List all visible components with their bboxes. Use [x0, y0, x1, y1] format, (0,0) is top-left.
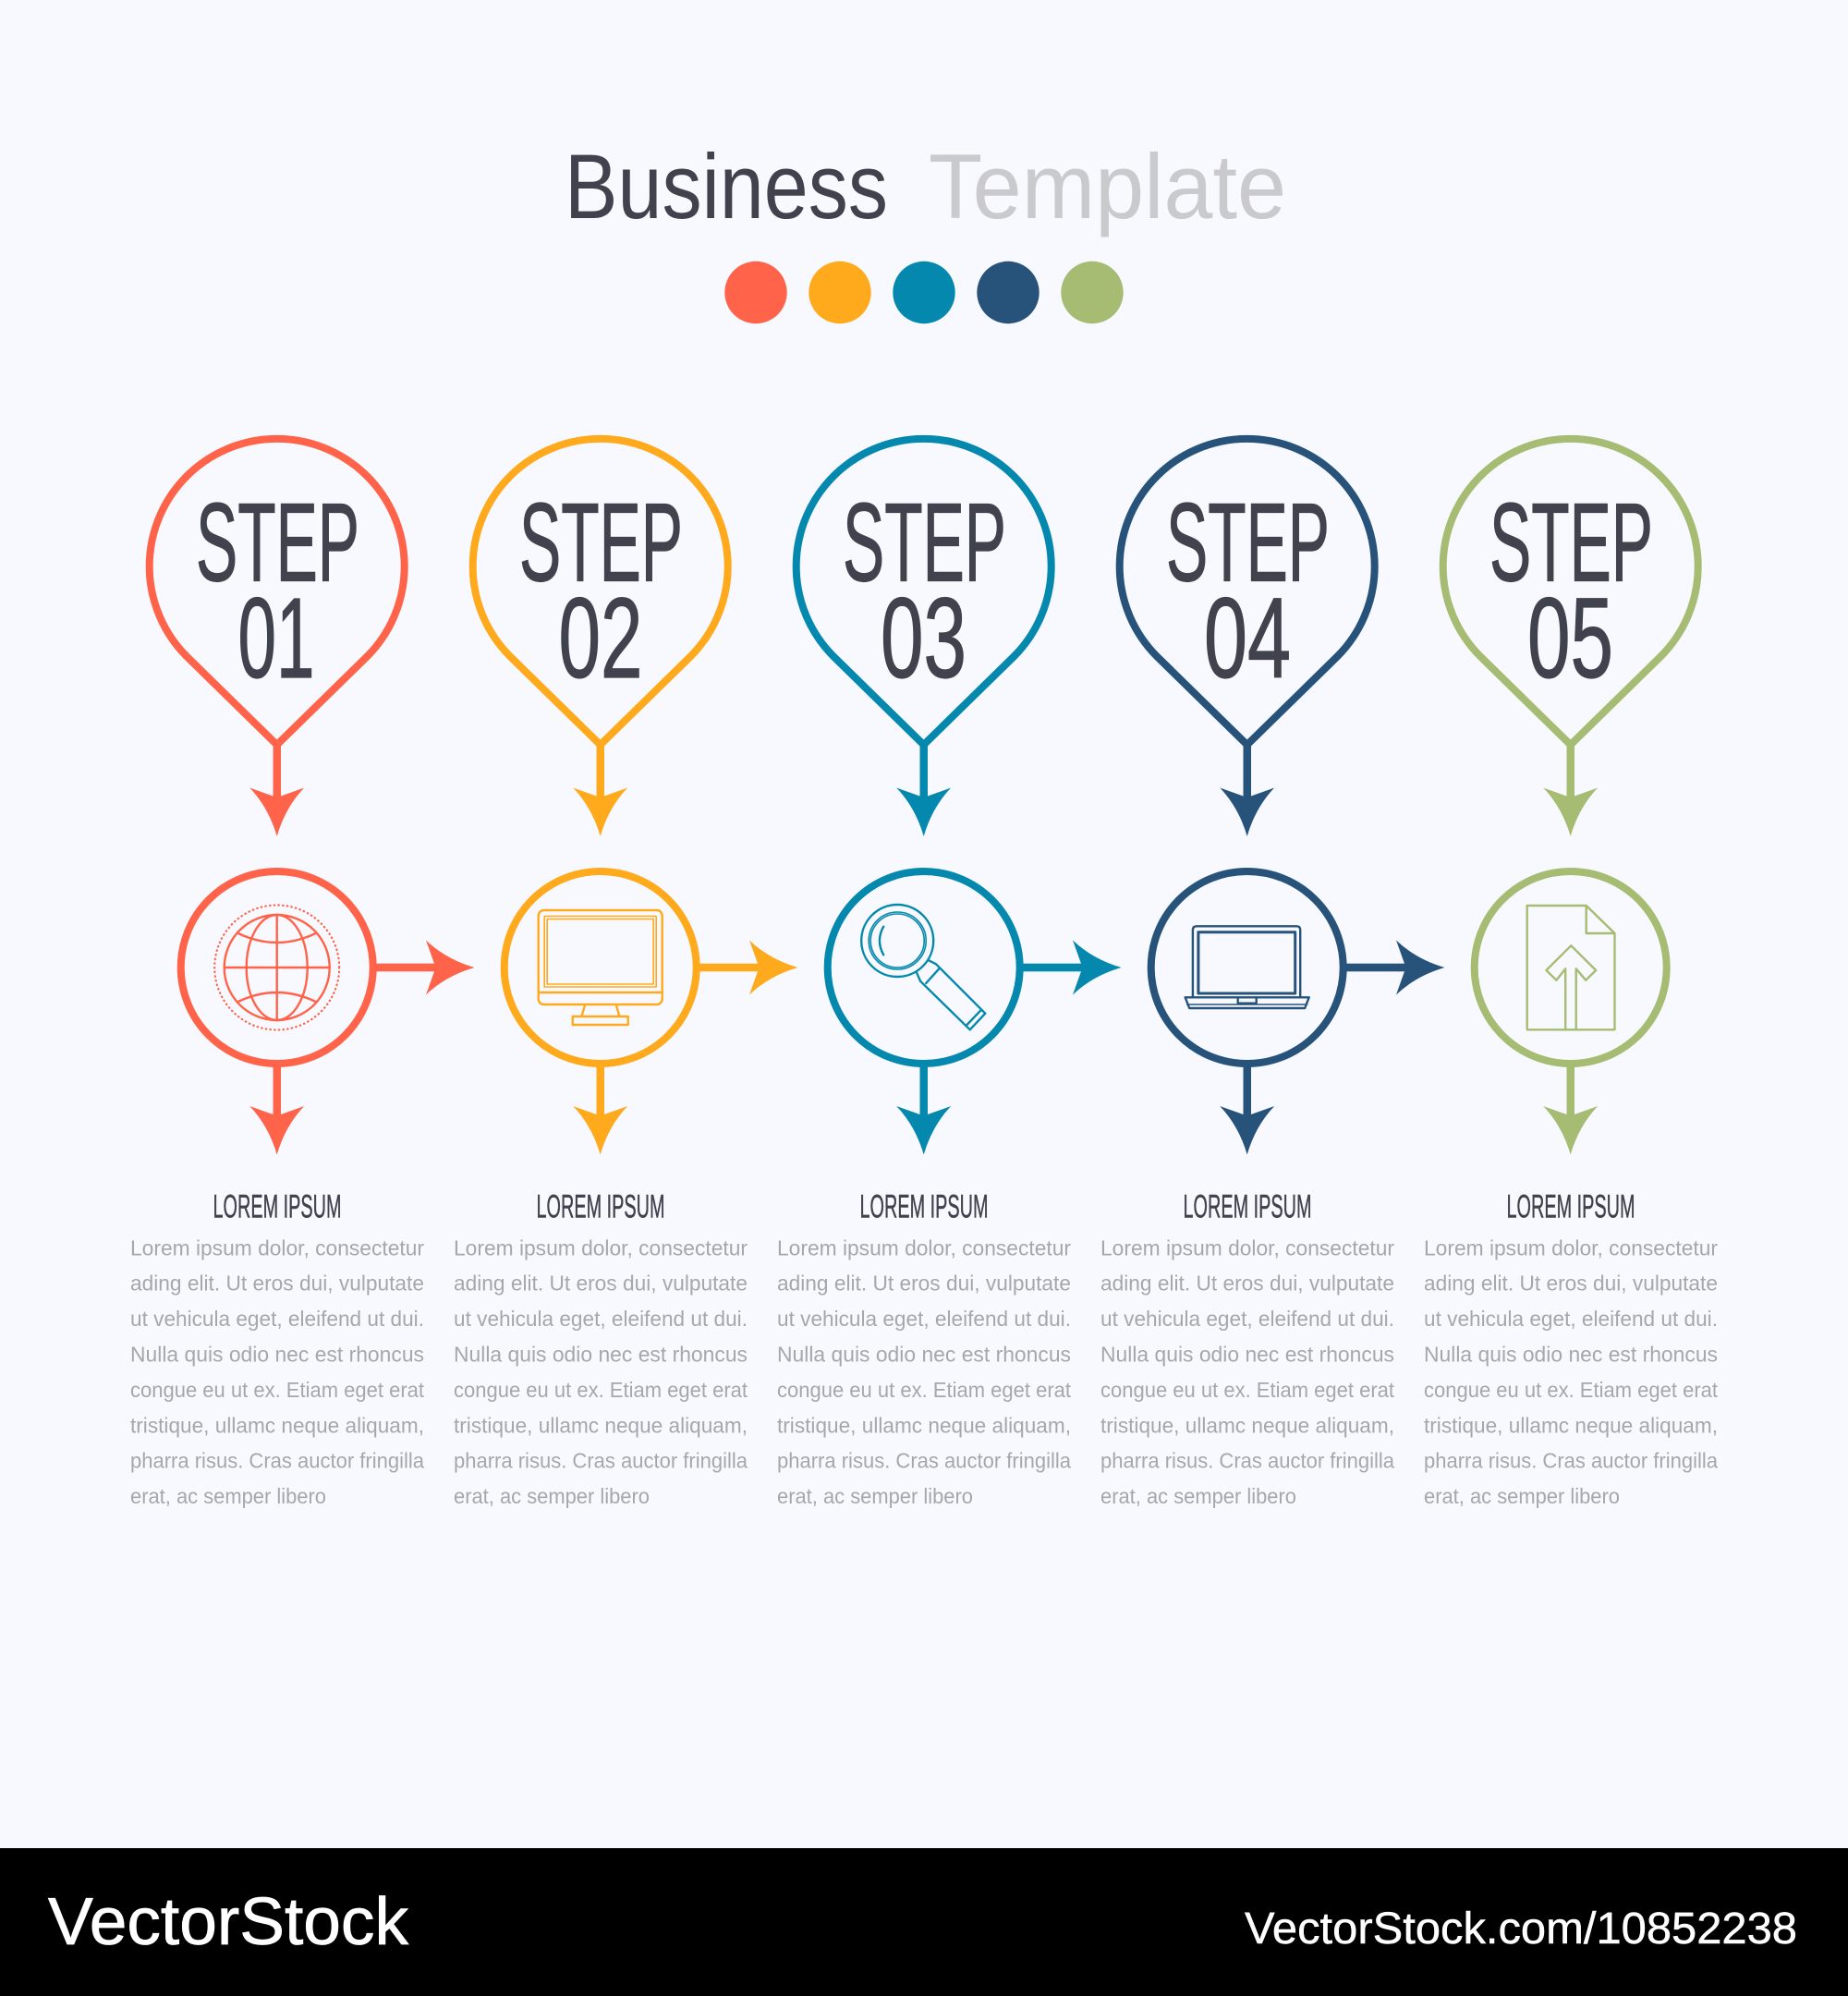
text block: step 02: Nulla quis odio nec est rhoncus	[454, 1342, 748, 1366]
text block: step 01: Nulla quis odio nec est rhoncus	[130, 1342, 424, 1366]
text block: step 02: LOREM IPSUM	[536, 1188, 665, 1225]
footer logo text: VectorStock	[48, 1885, 409, 1959]
pin: step 04: STEP	[1166, 479, 1330, 604]
arrow: to step 04	[1021, 941, 1122, 994]
text block: step 04: tristique, ullamc neque aliquam,	[1100, 1413, 1394, 1437]
text block: step 02: pharra risus. Cras auctor fringilla	[454, 1449, 748, 1473]
arrow: to step 02	[374, 941, 475, 994]
pin: step 01	[150, 439, 405, 745]
text block: step 01: erat, ac semper libero	[130, 1484, 326, 1508]
text block: step 04: LOREM IPSUM	[1183, 1188, 1312, 1225]
text block: step 03: tristique, ullamc neque aliquam,	[777, 1413, 1071, 1437]
text block: step 01: LOREM IPSUM	[213, 1188, 342, 1225]
text block: step 02: Lorem ipsum dolor, consectetur	[454, 1235, 748, 1260]
text block: step 03: Lorem ipsum dolor, consectetur	[777, 1235, 1071, 1260]
text block: step 02	[454, 1188, 748, 1508]
text block: step 02: tristique, ullamc neque aliquam,	[454, 1413, 748, 1437]
text block: step 04: ut vehicula eget, eleifend ut dui.	[1100, 1307, 1394, 1331]
pin: step 05: STEP	[1489, 479, 1653, 604]
panel: step 05	[1424, 439, 1719, 1508]
text block: step 04: pharra risus. Cras auctor fringilla	[1100, 1449, 1394, 1473]
text block: step 05: Lorem ipsum dolor, consectetur	[1424, 1235, 1718, 1260]
text block: step 05: ut vehicula eget, eleifend ut dui.	[1424, 1307, 1718, 1331]
footer url: VectorStock.com/10852238	[1245, 1905, 1797, 1953]
arrow: circle 05 to text	[1543, 1063, 1598, 1155]
pin: step 05: 05	[1527, 576, 1613, 702]
text block: step 04: Lorem ipsum dolor, consectetur	[1100, 1235, 1394, 1260]
pin: step 03: 03	[881, 576, 967, 702]
text block: step 05: Nulla quis odio nec est rhoncus	[1424, 1342, 1718, 1366]
text block: step 05: LOREM IPSUM	[1506, 1188, 1635, 1225]
text block: step 02: ut vehicula eget, eleifend ut dui.	[454, 1307, 748, 1331]
text block: step 01	[130, 1188, 425, 1508]
pin: step 04: 04	[1204, 576, 1291, 702]
pin: step 02: STEP	[519, 479, 683, 604]
colour dots	[724, 262, 1124, 323]
text block: step 01: congue eu ut ex. Etiam eget erat	[130, 1378, 425, 1402]
arrow: to step 05	[1344, 941, 1445, 994]
text block: step 05: erat, ac semper libero	[1424, 1484, 1620, 1508]
panel: step 01	[130, 439, 475, 1508]
arrow: pin to circle 03	[896, 745, 951, 836]
text block: step 04	[1100, 1188, 1395, 1508]
text block: step 01: ut vehicula eget, eleifend ut dui.	[130, 1307, 424, 1331]
arrow: to step 03	[698, 941, 798, 994]
pin: step 03	[796, 439, 1052, 745]
text block: step 01: tristique, ullamc neque aliquam,	[130, 1413, 424, 1437]
text block: step 02: erat, ac semper libero	[454, 1484, 650, 1508]
text block: step 03: congue eu ut ex. Etiam eget erat	[777, 1378, 1072, 1402]
pin: step 05	[1443, 439, 1698, 745]
text block: step 03: ading elit. Ut eros dui, vulputate	[777, 1272, 1071, 1296]
pin: step 04	[1120, 439, 1375, 745]
arrow: pin to circle 04	[1220, 745, 1274, 836]
icon: globe	[181, 871, 373, 1064]
text block: step 03: pharra risus. Cras auctor fringilla	[777, 1449, 1071, 1473]
text block: step 04: ading elit. Ut eros dui, vulputate	[1100, 1272, 1394, 1296]
text block: step 03	[777, 1188, 1072, 1508]
text block: step 03: Nulla quis odio nec est rhoncus	[777, 1342, 1071, 1366]
arrow: pin to circle 01	[249, 745, 304, 836]
title: Template	[929, 135, 1286, 237]
text block: step 02: ading elit. Ut eros dui, vulputate	[454, 1272, 748, 1296]
pin: step 02: 02	[558, 576, 643, 702]
arrow: pin to circle 02	[573, 745, 627, 836]
icon: magnifier	[828, 871, 1020, 1064]
pin: step 02	[473, 439, 728, 745]
pin: step 01: 01	[238, 576, 314, 702]
title	[565, 135, 1286, 237]
title: Business	[565, 135, 888, 237]
icon: monitor	[505, 871, 697, 1064]
text block: step 02: congue eu ut ex. Etiam eget erat	[454, 1378, 748, 1402]
icon: laptop	[1151, 871, 1343, 1064]
pin: step 01: STEP	[196, 479, 359, 604]
text block: step 03: ut vehicula eget, eleifend ut dui.	[777, 1307, 1071, 1331]
panel: step 04	[1100, 439, 1445, 1508]
text block: step 05: congue eu ut ex. Etiam eget erat	[1424, 1378, 1719, 1402]
panel: step 03	[777, 439, 1122, 1508]
panel: step 02	[454, 439, 798, 1508]
text block: step 01: Lorem ipsum dolor, consectetur	[130, 1235, 424, 1260]
text block: step 05	[1424, 1188, 1719, 1508]
arrow: circle 02 to text	[573, 1063, 627, 1155]
text block: step 05: ading elit. Ut eros dui, vulputate	[1424, 1272, 1718, 1296]
icon: file upload	[1475, 871, 1667, 1064]
text block: step 04: Nulla quis odio nec est rhoncus	[1100, 1342, 1394, 1366]
text block: step 03: erat, ac semper libero	[777, 1484, 973, 1508]
arrow: circle 03 to text	[896, 1063, 951, 1155]
text block: step 05: tristique, ullamc neque aliquam,	[1424, 1413, 1718, 1437]
text block: step 01: ading elit. Ut eros dui, vulputate	[130, 1272, 424, 1296]
footer bar	[0, 1848, 1848, 1996]
text block: step 03: LOREM IPSUM	[859, 1188, 989, 1225]
arrow: pin to circle 05	[1543, 745, 1598, 836]
pin: step 03: STEP	[843, 479, 1006, 604]
arrow: circle 04 to text	[1220, 1063, 1274, 1155]
text block: step 01: pharra risus. Cras auctor fringilla	[130, 1449, 424, 1473]
text block: step 04: erat, ac semper libero	[1100, 1484, 1296, 1508]
text block: step 04: congue eu ut ex. Etiam eget erat	[1100, 1378, 1395, 1402]
arrow: circle 01 to text	[249, 1063, 304, 1155]
text block: step 05: pharra risus. Cras auctor fringilla	[1424, 1449, 1718, 1473]
